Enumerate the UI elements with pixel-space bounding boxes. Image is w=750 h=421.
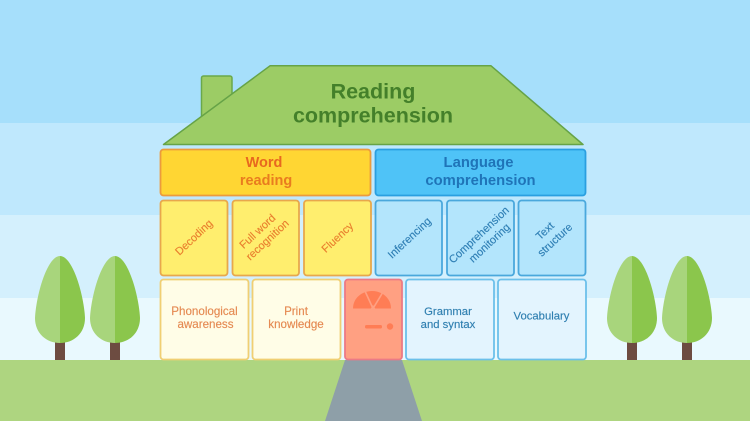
card: inferencing: Inferencing (386, 215, 434, 261)
chimney (202, 76, 232, 121)
card: phonological awareness: Phonological (171, 305, 238, 318)
tree 1 (35, 256, 85, 360)
card: vocabulary (498, 280, 586, 360)
roof (164, 66, 583, 144)
card: grammar and syntax: and syntax (421, 319, 476, 331)
tree 4 (662, 256, 712, 360)
icon: door handle (365, 323, 393, 330)
card: decoding (160, 200, 228, 276)
card: grammar and syntax: Grammar (424, 306, 472, 318)
card: vocabulary: Vocabulary (514, 310, 570, 322)
roof title: Reading (331, 80, 415, 104)
card: text structure: Text (534, 220, 557, 243)
panel: language comprehension (376, 150, 586, 196)
door (345, 280, 402, 360)
card: print knowledge: knowledge (268, 318, 324, 331)
ground (0, 360, 750, 421)
card: grammar and syntax (406, 280, 494, 360)
tree 2 (90, 256, 140, 360)
panel: language comprehension: comprehension (425, 173, 536, 189)
icon: door window (353, 290, 391, 309)
card: phonological awareness (160, 280, 248, 360)
card: fluency (304, 200, 371, 276)
card: full word recognition (232, 200, 299, 276)
card: full word recognition: recognition (244, 218, 292, 263)
card: phonological awareness: awareness (177, 318, 234, 331)
card: comprehension monitoring: monitoring (467, 221, 513, 265)
card: inferencing (376, 200, 442, 276)
tree 3 (607, 256, 657, 360)
card: text structure: structure (536, 221, 575, 259)
card: print knowledge (252, 280, 340, 360)
card: text structure (518, 200, 586, 276)
card: comprehension monitoring: Comprehension (447, 204, 512, 266)
path (325, 360, 422, 421)
card: print knowledge: Print (284, 305, 309, 318)
card: full word recognition: Full word (237, 212, 278, 251)
panel: language comprehension: Language (444, 155, 513, 171)
panel: word reading: reading (240, 173, 292, 189)
panel: word reading (160, 150, 370, 196)
panel: word reading: Word (246, 155, 282, 171)
roof: comprehension (293, 104, 453, 128)
card: decoding: Decoding (173, 218, 215, 258)
card: fluency: Fluency (320, 220, 356, 255)
